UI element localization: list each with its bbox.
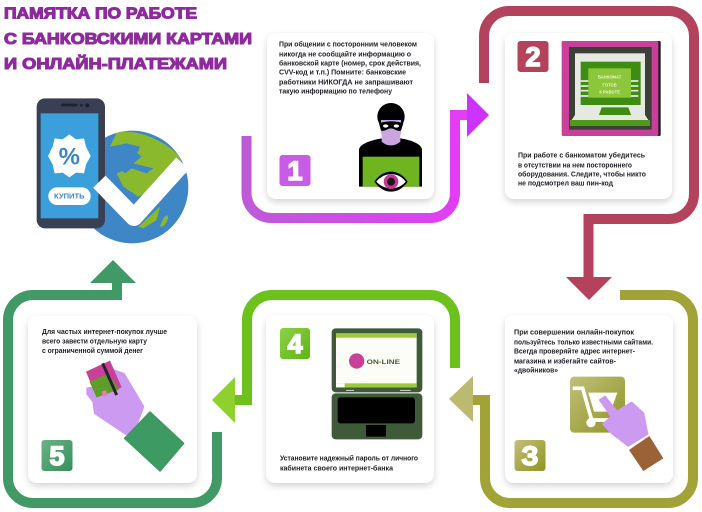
text: step 3 (514, 328, 653, 374)
panel: step 4 (266, 315, 434, 483)
icon: globe (76, 131, 188, 243)
text: step 2: в отсутствии на нем постороннего (518, 160, 632, 170)
text: step 3: магазина и избегайте сайтов- (514, 356, 616, 366)
text: step 1: такую информацию по телефону (279, 86, 393, 96)
arrow 3 (449, 295, 693, 503)
badge 3 (514, 440, 546, 471)
text: ATM screen: К РАБОТЕ (599, 89, 620, 94)
text: step 2: При работе с банкоматом убедитесь (518, 150, 645, 160)
text: step 3: При совершении онлайн-покупок (514, 328, 634, 336)
icon: laptop (332, 328, 422, 439)
text: step 3: пользуйтесь только известными сайтами. (514, 338, 653, 346)
icon: ATM (562, 41, 661, 136)
badge 4: 4 (287, 329, 303, 359)
badge 1 (280, 155, 310, 186)
text: ATM screen: ГОТОВ (603, 82, 617, 87)
panel: step 3 (505, 315, 673, 483)
text: step 3: «двойников» (514, 366, 558, 374)
text: step 1: банковской карте (номер, срок действия, (279, 58, 421, 68)
badge 1: 1 (287, 156, 303, 186)
text: ATM screen: БАНКОМАТ (598, 75, 622, 80)
icon: phone: % (59, 144, 80, 171)
badge 2 (518, 41, 548, 72)
text: step 1: никогда не сообщайте информацию о (279, 50, 411, 58)
panel: step 5 (28, 316, 197, 483)
text: step 1: CVV-код и т.п.) Помните: банковские (279, 68, 406, 76)
text: step 5: всего завести отдельную карту (42, 336, 148, 346)
text: step 1: При общении с посторонним человеком (279, 40, 417, 48)
icon: laptop: ON-LINE (367, 359, 401, 366)
arrow 2 (484, 11, 694, 300)
text: step 5: с ограниченной суммой денег (42, 346, 143, 355)
text: step 5: Для частых интернет-покупок лучше (42, 327, 167, 336)
text: step 1 (279, 40, 421, 96)
icon: cart with hand (570, 377, 663, 471)
panel: step 1 (267, 33, 434, 199)
text: ATM screen (598, 75, 622, 94)
badge 2: 2 (525, 42, 541, 72)
icon: check mark (99, 163, 183, 217)
badge 5 (42, 440, 72, 471)
text: step 2: не подсмотрел ваш пин-код (518, 178, 613, 188)
arrow 5 (8, 260, 217, 503)
text: step 1: работники НИКОГДА не запрашивают (279, 78, 413, 86)
icon: hacker with laptop (359, 103, 422, 192)
icon: phone: КУПИТЬ (54, 191, 85, 200)
title: ПАМЯТКА ПО РАБОТЕ (4, 6, 197, 22)
text: step 2 (518, 150, 646, 188)
text: step 4: Установите надежный пароль от личного (280, 454, 418, 462)
text: step 5 (42, 327, 167, 355)
title: И ОНЛАЙН-ПЛАТЕЖАМИ (4, 55, 227, 73)
title (4, 6, 252, 73)
badge 3: З (522, 441, 538, 471)
badge 4 (280, 328, 310, 359)
arrow 4 (212, 295, 455, 423)
icon: hand with card (86, 361, 183, 471)
arrow 1 (246, 93, 489, 218)
illustration: globe, phone and check mark (37, 98, 188, 243)
badge 5: 5 (49, 441, 65, 471)
title: С БАНКОВСКИМИ КАРТАМИ (4, 31, 252, 48)
panel: step 2 (505, 33, 672, 199)
text: step 3: Всегда проверяйте адрес интернет- (514, 346, 635, 356)
icon: phone (37, 98, 105, 228)
text: step 4 (280, 454, 418, 472)
text: step 2: оборудования. Следите, чтобы никто (518, 170, 646, 178)
text: step 4: кабинета своего интернет-банка (280, 464, 394, 472)
